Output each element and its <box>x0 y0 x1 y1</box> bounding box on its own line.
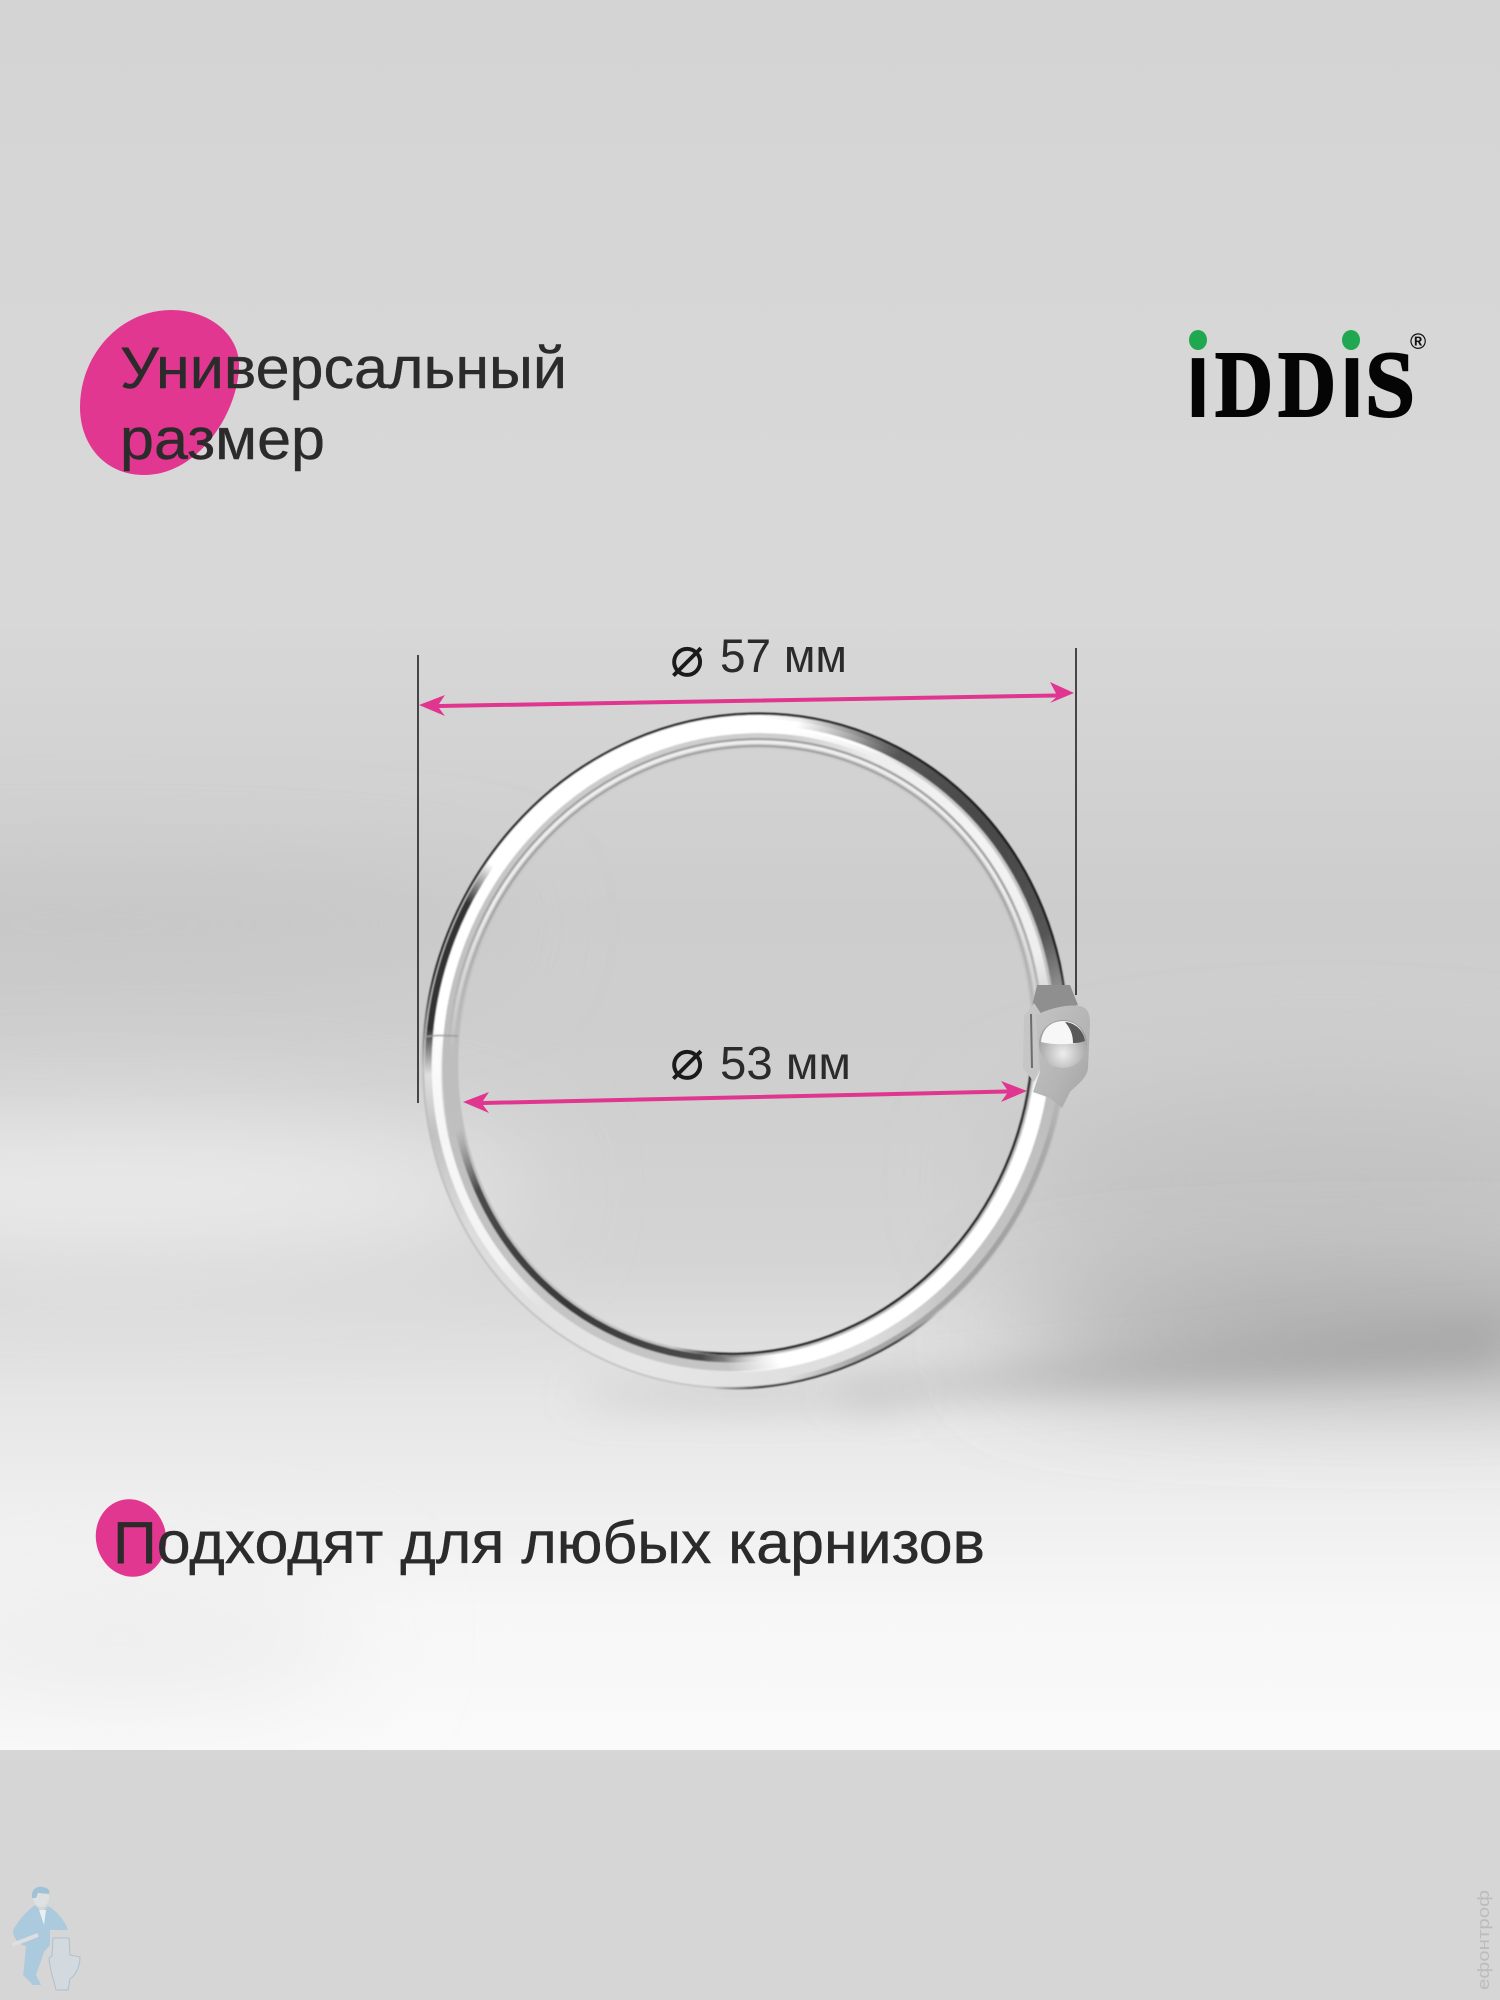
footer band <box>0 1750 1500 2000</box>
caption text: Подходят для любых карнизов <box>113 1510 985 1576</box>
measurement extension lines <box>418 648 1076 1103</box>
label: inner diameter 53 mm: 53 мм <box>720 1037 851 1089</box>
logo: IDDIS: D <box>1278 333 1336 437</box>
pink blob behind caption <box>88 1492 174 1584</box>
label: inner diameter 53 mm: ⌀ <box>670 1027 704 1093</box>
label: outer diameter 57 mm: 57 мм <box>720 629 847 682</box>
logo: IDDIS <box>1186 329 1426 437</box>
label: inner diameter 53 mm <box>670 1027 851 1093</box>
seam on the left of the ring <box>423 1036 458 1038</box>
clasp neck top <box>1030 985 1078 1015</box>
wrench <box>12 1935 38 1945</box>
plumber head <box>33 1887 49 1907</box>
mascot: plumber with toilet watermark <box>12 1887 80 1990</box>
photo background with studio lighting <box>0 830 1500 1750</box>
pink blob behind heading <box>80 310 239 475</box>
logo: IDDIS: S <box>1365 333 1415 437</box>
heading: universal size <box>80 310 567 475</box>
ring clasp <box>1023 985 1090 1108</box>
label: outer diameter 57 mm <box>670 624 847 690</box>
logo: IDDIS: I <box>1186 341 1210 436</box>
label: outer diameter 57 mm: ⌀ <box>670 624 704 690</box>
plumber shirt <box>39 1910 46 1925</box>
chrome ring <box>324 618 1166 1484</box>
clasp ball rivet <box>1039 1020 1087 1068</box>
heading line 1: Универсальный <box>120 336 567 401</box>
logo: IDDIS: I <box>1340 341 1364 436</box>
clasp plate <box>1033 1005 1090 1108</box>
caption: fits any curtain rod <box>88 1492 985 1584</box>
clasp left flap <box>1023 1003 1040 1082</box>
toilet <box>49 1938 80 1990</box>
logo: IDDIS: ® <box>1410 329 1426 354</box>
arrow: inner diameter <box>463 1081 1027 1113</box>
plumber body <box>13 1905 68 1985</box>
logo: IDDIS: D <box>1215 333 1273 437</box>
arrow: outer diameter <box>419 682 1074 716</box>
heading line 2: размер <box>120 407 325 472</box>
vertical watermark text: ефонтроф <box>1474 1890 1493 1990</box>
